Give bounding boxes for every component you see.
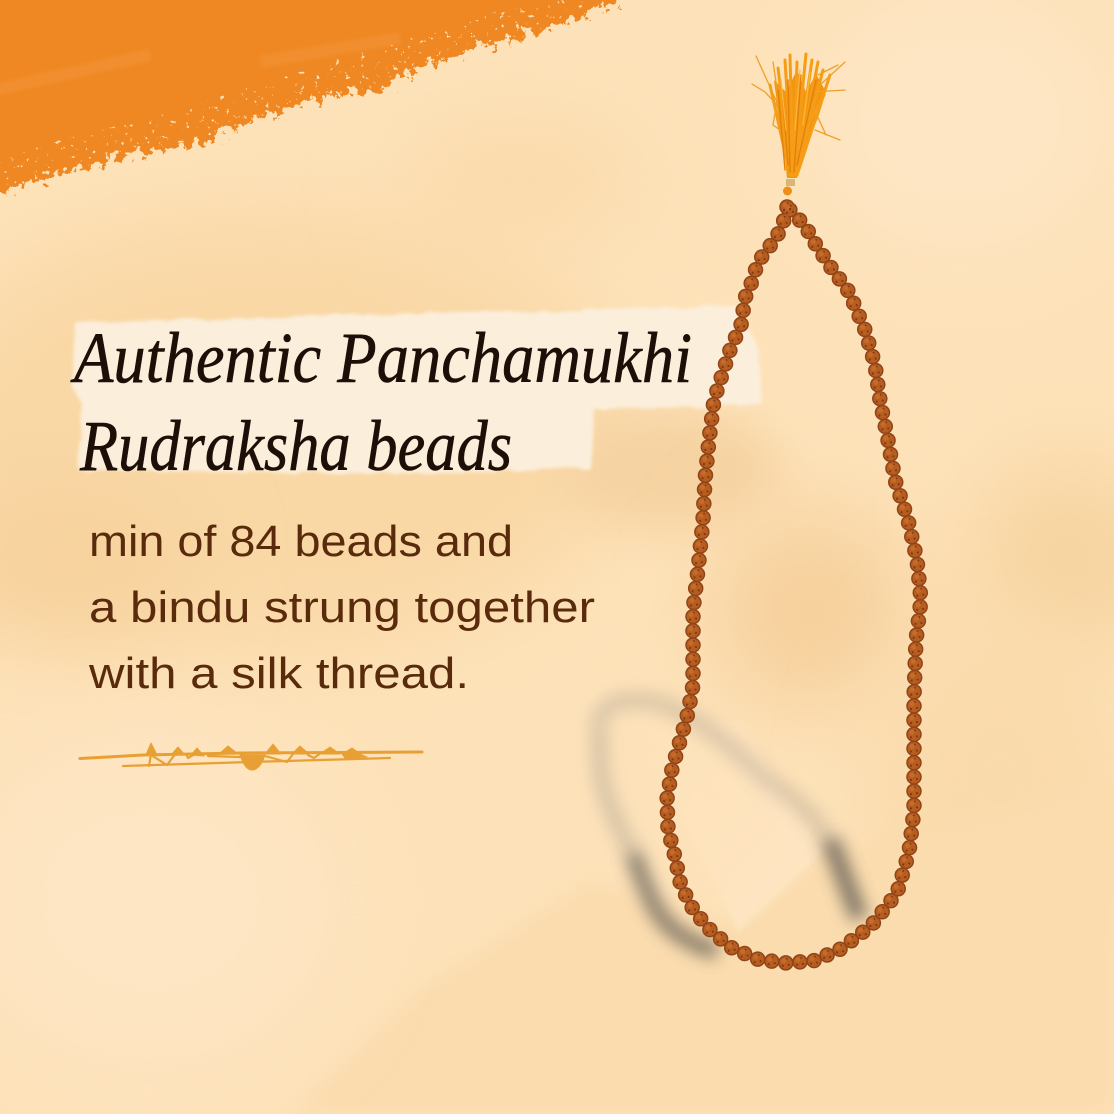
title highlight brush: [72, 306, 763, 474]
squiggle divider: [80, 743, 422, 770]
body text: [88, 517, 595, 698]
body text: min of 84 beads and: [89, 517, 513, 566]
necklace shadow: [599, 700, 860, 952]
title: [70, 318, 692, 486]
body text: a bindu strung together: [89, 583, 595, 632]
title: Rudraksha beads: [79, 406, 512, 486]
title: Authentic Panchamukhi: [70, 318, 692, 398]
silk tassel: [752, 54, 845, 196]
orange brush stroke: [0, 0, 640, 194]
rudraksha bead necklace: [664, 203, 924, 966]
body text: with a silk thread.: [88, 649, 469, 698]
